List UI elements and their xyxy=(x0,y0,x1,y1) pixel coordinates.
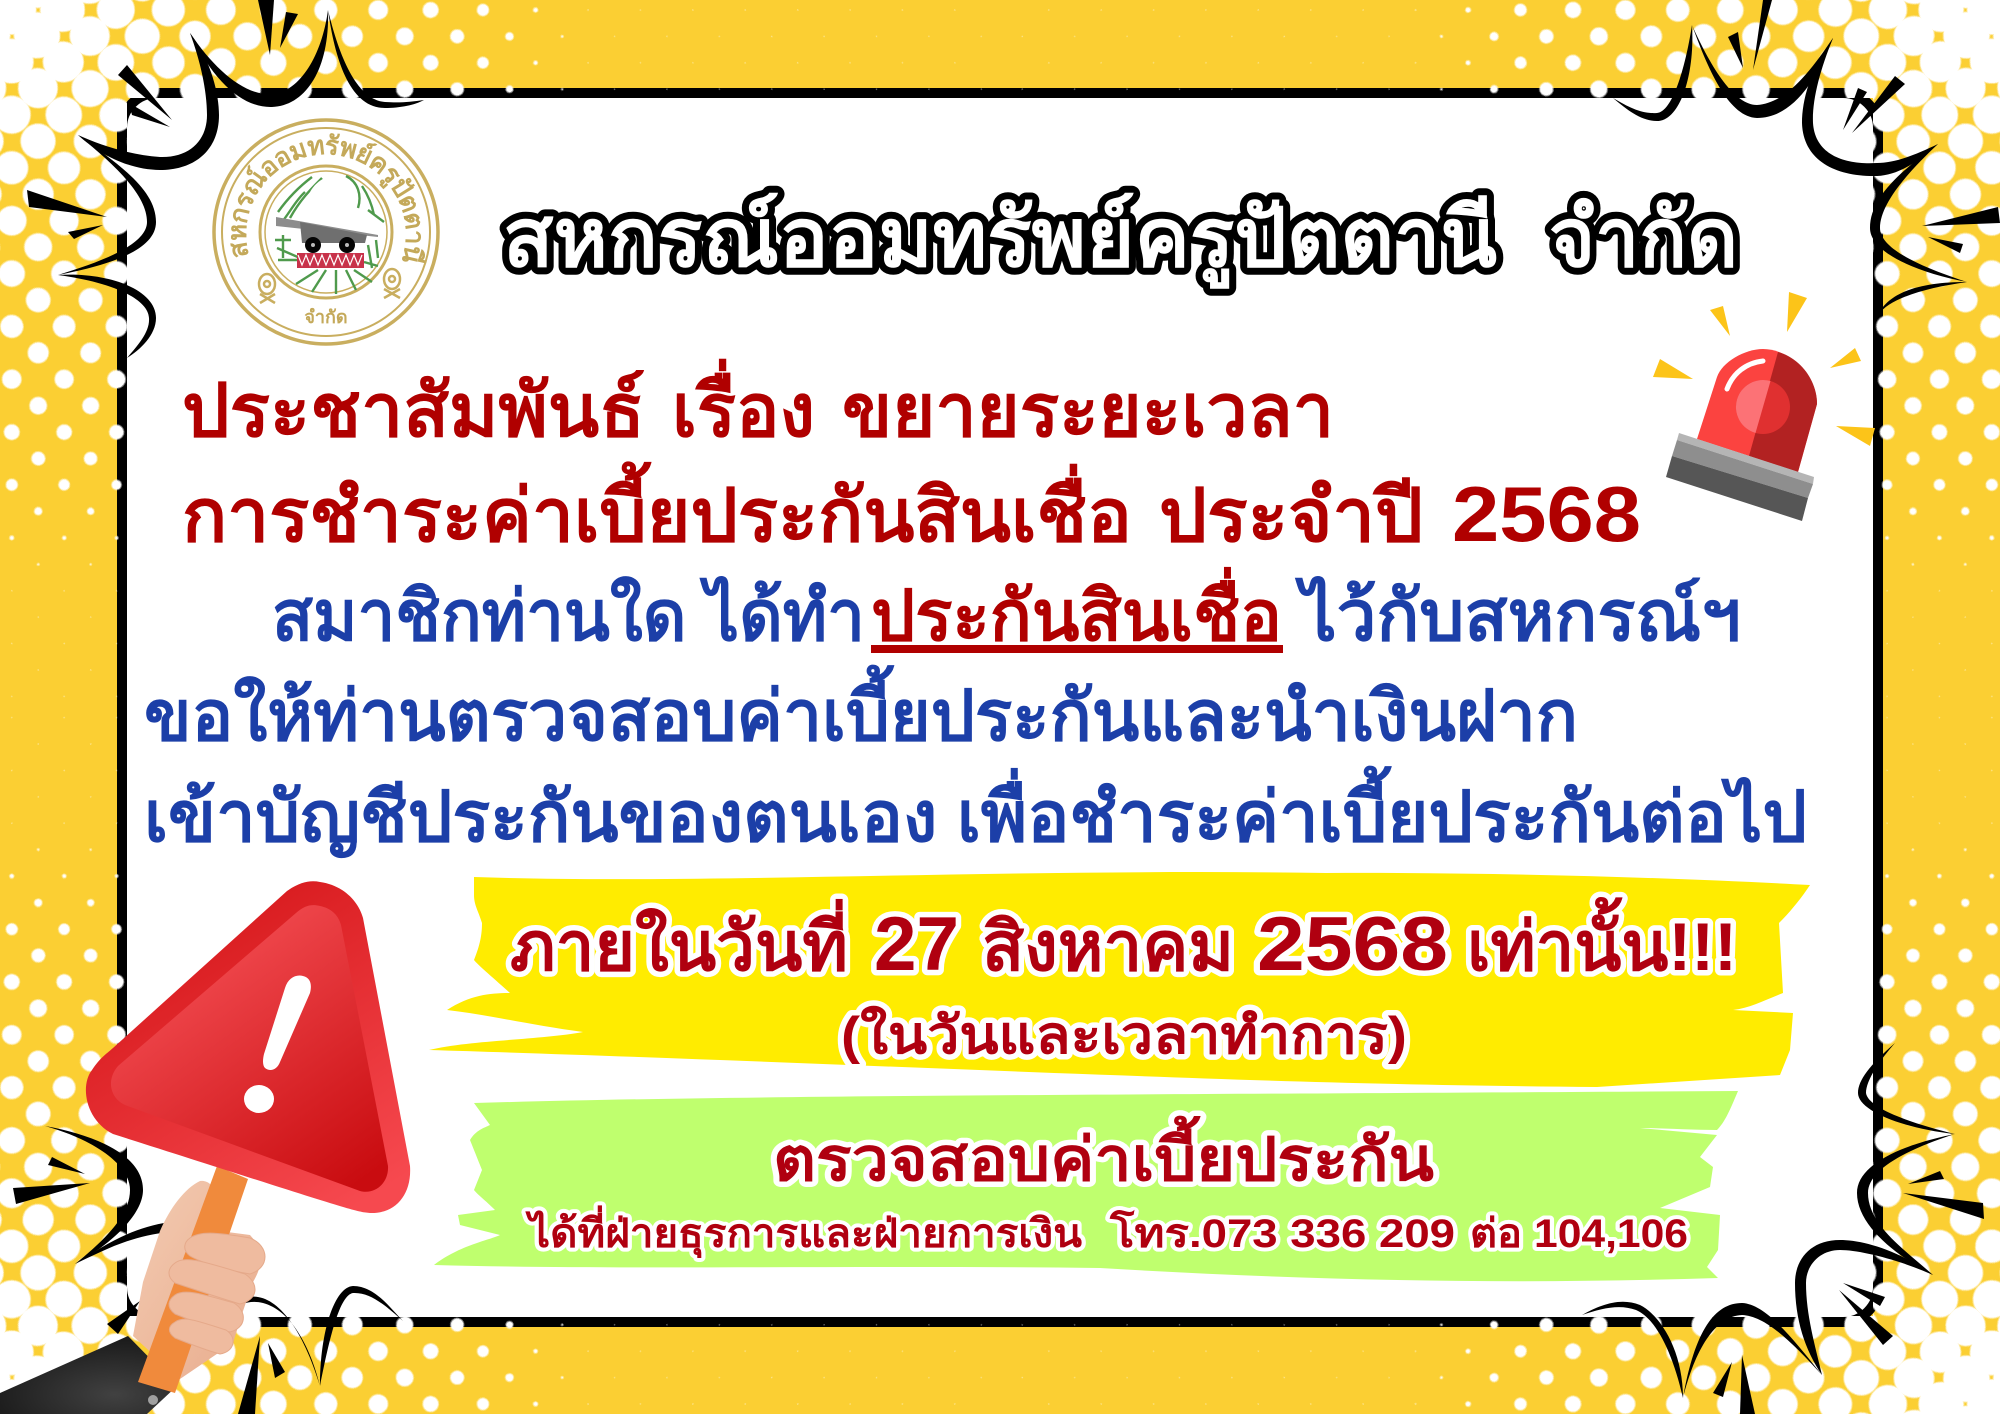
body line 1: สมาชิกท่านใด ได้ทำ xyxy=(272,575,865,655)
deadline text: สิงหาคม xyxy=(982,909,1234,985)
heading line 1: ขยายระยะเวลา xyxy=(842,369,1334,452)
stick xyxy=(138,1166,248,1393)
contact line xyxy=(525,1205,1688,1259)
logo lower text: จำกัด xyxy=(304,307,348,327)
logo green landscape xyxy=(275,176,384,294)
deadline text: 2568 xyxy=(1257,902,1448,987)
contact line: 104,106 xyxy=(1534,1212,1688,1256)
sleeve xyxy=(0,1336,177,1414)
brush stroke: green xyxy=(434,1091,1738,1281)
heading line 1: เรื่อง xyxy=(672,358,815,452)
heading line 2 xyxy=(182,461,1641,558)
logo ring text: สหกรณ์ออมทรัพย์ครูปัตตานี xyxy=(230,133,425,263)
underlined emphasis: ประกันสินเชื่อ xyxy=(871,566,1282,655)
deadline note: (ในวันและเวลาทำการ) xyxy=(841,1005,1407,1065)
icon: red alarm siren xyxy=(1653,292,1875,521)
body line 2: ขอให้ท่านตรวจสอบค่าเบี้ยประกันและนำเงินฝาก xyxy=(144,664,1578,755)
check premium heading: ตรวจสอบค่าเบี้ยประกัน xyxy=(773,1115,1434,1193)
icon: hand holding warning sign xyxy=(0,881,410,1414)
body line 1: ไว้กับสหกรณ์ฯ xyxy=(1294,575,1741,655)
palm xyxy=(133,1181,261,1379)
logo red band xyxy=(297,253,364,268)
contact line: ต่อ xyxy=(1470,1212,1522,1256)
heading line 1 xyxy=(182,358,1334,452)
burst: top left xyxy=(27,0,424,358)
burst: bottom right xyxy=(1582,1043,1984,1414)
white card with black frame xyxy=(117,88,1883,1327)
fingers xyxy=(169,1233,265,1354)
contact line: ได้ที่ฝ่ายธุรการและฝ่ายการเงิน xyxy=(525,1205,1082,1259)
exclamation mark xyxy=(244,976,311,1113)
logo white hill xyxy=(305,176,356,224)
body line 3: เข้าบัญชีประกันของตนเอง เพื่อชำระค่าเบี้ยประกันต่อไป xyxy=(144,765,1807,859)
title: สหกรณ์ออมทรัพย์ครูปัตตานี xyxy=(503,192,1497,289)
sign inner panel xyxy=(111,905,388,1192)
heading line 2: การชำระค่าเบี้ยประกันสินเชื่อ xyxy=(182,461,1132,557)
deadline text xyxy=(510,896,1737,987)
logo cannon xyxy=(276,217,378,253)
heading line 2: ประจำปี xyxy=(1159,474,1423,557)
deadline text: เท่านั้น!!! xyxy=(1467,896,1737,985)
deadline text: 27 xyxy=(874,902,959,987)
logo: cooperative seal xyxy=(212,118,440,346)
title: จำกัด xyxy=(1549,193,1738,284)
contact line: โทร.073 336 209 xyxy=(1109,1210,1455,1256)
heading line 1: ประชาสัมพันธ์ xyxy=(182,369,645,452)
heading line 2: 2568 xyxy=(1452,470,1641,558)
deadline text: ภายในวันที่ xyxy=(510,898,848,985)
burst: bottom left xyxy=(13,1126,403,1414)
warning triangle sign xyxy=(86,881,410,1213)
brush stroke: yellow xyxy=(429,872,1810,1087)
logo ornaments xyxy=(259,269,400,303)
burst: top right xyxy=(1613,0,2000,315)
body line 1 xyxy=(272,566,1741,655)
